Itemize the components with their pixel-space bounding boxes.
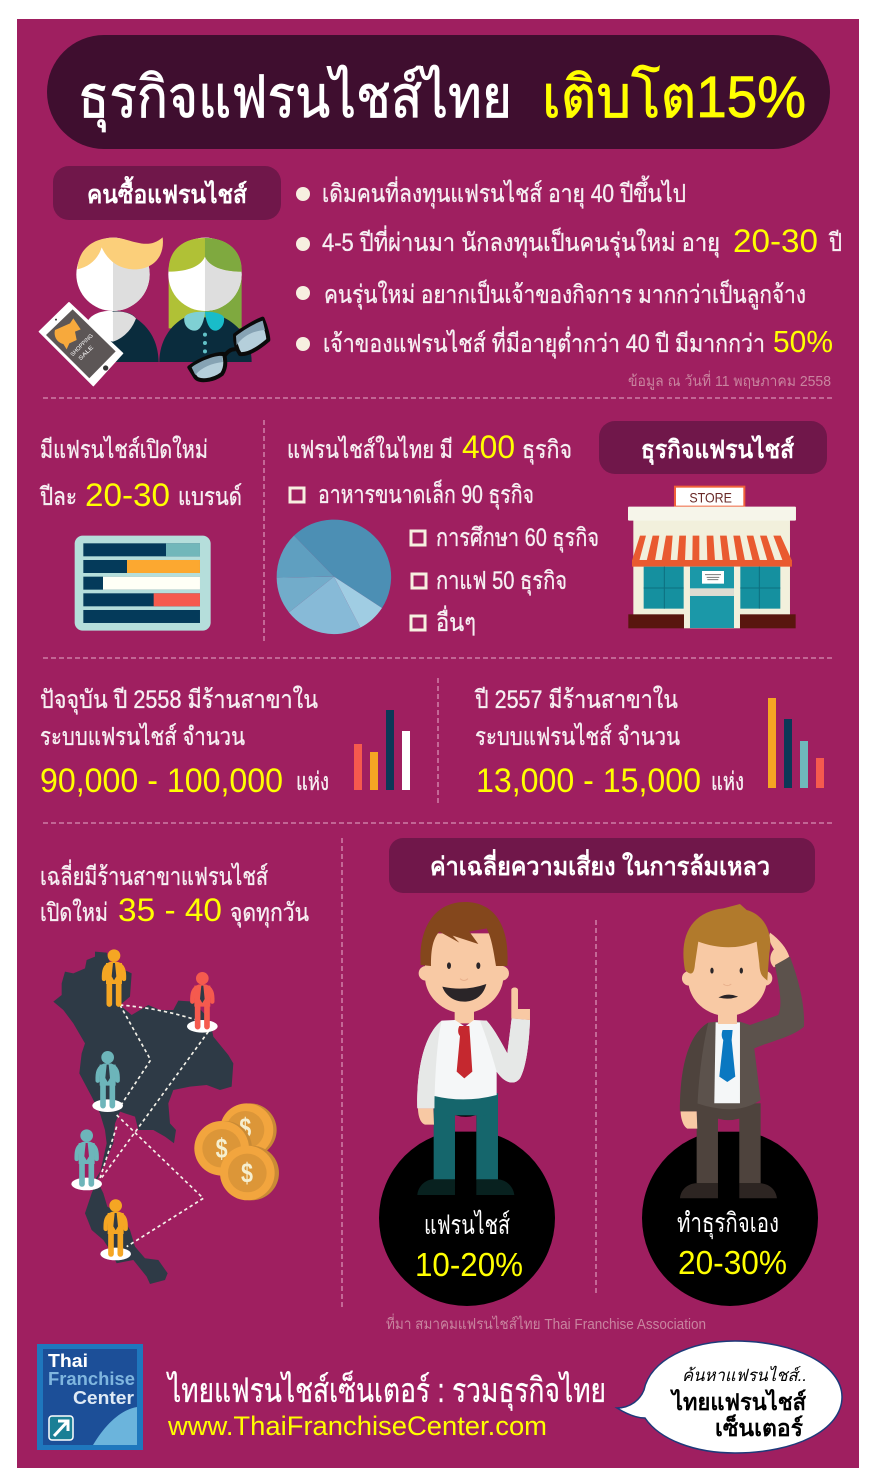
heading: franchise businesses: ธุรกิจแฟรนไชส์: [641, 434, 795, 466]
legend: business categories: อื่นๆ: [436, 605, 476, 637]
speech bubble callout: [617, 1341, 842, 1453]
legend: business categories: การศึกษา 60 ธุรกิจ: [436, 524, 599, 553]
text: branches in 2558: ระบบแฟรนไชส์ จำนวน: [40, 722, 245, 751]
logo: Thai Franchise Center: [37, 1344, 143, 1450]
text: franchises in Thailand total: ธุรกิจ: [522, 436, 572, 465]
icon: young couple with phone and glasses: SALE: [78, 345, 95, 362]
text: branches in 2557: แห่ง: [711, 768, 744, 796]
icon: coins: $: [241, 1158, 253, 1189]
text: branches in 2557: ระบบแฟรนไชส์ จำนวน: [475, 722, 680, 751]
illustration: smiling franchise man: [417, 902, 530, 1195]
callout: own business risk circle: 20-30%: [678, 1244, 787, 1281]
legend: business categories: อาหารขนาดเล็ก 90 ธุรกิจ: [318, 479, 534, 510]
bullet list: investor facts: 50%: [773, 324, 833, 359]
text: new franchises per year: 20-30: [85, 477, 170, 513]
pie chart: business categories: [277, 520, 391, 634]
text: franchises in Thailand total: 400: [462, 429, 515, 465]
bullet list: investor facts: ปี: [829, 229, 842, 257]
text: branches in 2557: [475, 685, 744, 800]
icon: young couple with phone and glasses: [39, 237, 268, 386]
bar chart: 2557: [768, 698, 824, 788]
heading: average failure risk: [389, 838, 815, 893]
bullet list: investor facts: เจ้าของแฟรนไชส์ ที่มีอายุต่ำกว่า 40 ปี มีมากกว่า: [323, 326, 765, 359]
heading: franchise buyers: [53, 166, 281, 220]
bullet list: investor facts: 4-5 ปีที่ผ่านมา นักลงทุนเป็นคนรุ่นใหม่ อายุ: [322, 225, 720, 258]
logo: Thai Franchise Center: Thai: [48, 1351, 88, 1371]
legend: business categories: กาแฟ 50 ธุรกิจ: [436, 567, 567, 596]
logo: Thai Franchise Center: Center: [73, 1388, 134, 1408]
callout: own business risk circle: [642, 1130, 818, 1306]
icon: storefront: STORE: [689, 489, 732, 505]
legend: business categories: [290, 479, 599, 637]
speech bubble callout: ค้นหาแฟรนไชส์..: [682, 1365, 807, 1385]
bullet list: investor facts: 20-30: [733, 223, 818, 259]
bullet list: investor facts: [296, 175, 842, 359]
text: new franchises per year: [40, 435, 242, 513]
speech bubble callout: เซ็นเตอร์: [715, 1413, 804, 1441]
text: branches in 2558: [40, 685, 329, 800]
illustration: worried self-employed man: [680, 904, 804, 1198]
speech bubble callout: ไทยแฟรนไชส์: [669, 1388, 807, 1415]
callout: franchise risk circle: 10-20%: [415, 1246, 523, 1283]
heading: franchise businesses: [599, 421, 827, 474]
bar chart: 2558: [354, 710, 410, 790]
data source note: ข้อมูล ณ วันที่ 11 พฤษภาคม 2558: [628, 370, 831, 390]
footer text: site name and URL: www.ThaiFranchiseCenter.com: [167, 1411, 547, 1441]
footer text: site name and URL: ไทยแฟรนไชส์เซ็นเตอร์ : รวมธุรกิจไทย: [166, 1370, 606, 1411]
text: new branches per day: เฉลี่ยมีร้านสาขาแฟรนไชส์: [40, 859, 268, 891]
text: branches in 2557: ปี 2557 มีร้านสาขาใน: [475, 685, 678, 714]
callout: franchise risk circle: [379, 1130, 555, 1306]
heading: franchise buyers: คนซื้อแฟรนไชส์: [87, 175, 248, 209]
text: new branches per day: [40, 859, 309, 928]
text: branches in 2558: 90,000 - 100,000: [40, 762, 283, 800]
text: franchises in Thailand total: [287, 429, 572, 465]
heading: average failure risk: ค่าเฉลี่ยความเสี่ยง ในการล้มเหลว: [430, 849, 770, 881]
icon: bar panel: [75, 536, 211, 631]
text: branches in 2558: ปัจจุบัน ปี 2558 มีร้านสาขาใน: [40, 685, 318, 715]
title banner: เติบโต15%: [542, 64, 806, 130]
text: new franchises per year: แบรนด์: [178, 483, 242, 511]
text: new franchises per year: มีแฟรนไชส์เปิดใหม่: [40, 435, 208, 464]
text: branches in 2557: 13,000 - 15,000: [476, 762, 701, 800]
text: new franchises per year: ปีละ: [40, 483, 77, 511]
logo: Thai Franchise Center: Franchise: [48, 1369, 135, 1389]
icon: coins: $: [216, 1133, 228, 1164]
title banner: [47, 35, 830, 149]
text: franchises in Thailand total: แฟรนไชส์ในไทย มี: [287, 435, 453, 464]
title banner: ธุรกิจแฟรนไชส์ไทย: [78, 64, 512, 133]
icon: storefront: [628, 487, 796, 628]
icon: young couple with phone and glasses: SHOPPING: [70, 333, 95, 358]
text: new branches per day: เปิดใหม่: [40, 898, 108, 927]
text: new branches per day: 35 - 40: [118, 892, 222, 928]
callout: franchise risk circle: แฟรนไชส์: [424, 1209, 510, 1240]
text: branches in 2558: แห่ง: [296, 768, 329, 796]
callout: own business risk circle: ทำธุรกิจเอง: [677, 1208, 779, 1240]
text: new branches per day: จุดทุกวัน: [230, 899, 309, 928]
bullet list: investor facts: เดิมคนที่ลงทุนแฟรนไชส์ อายุ 40 ปีขึ้นไป: [322, 175, 686, 209]
source note: ที่มา สมาคมแฟรนไชส์ไทย Thai Franchise Association: [386, 1313, 706, 1333]
icon: coins: [194, 1103, 279, 1200]
icon: coins: $: [239, 1112, 252, 1143]
map: Thailand with people and routes: [53, 949, 233, 1284]
footer text: site name and URL: [166, 1370, 606, 1441]
